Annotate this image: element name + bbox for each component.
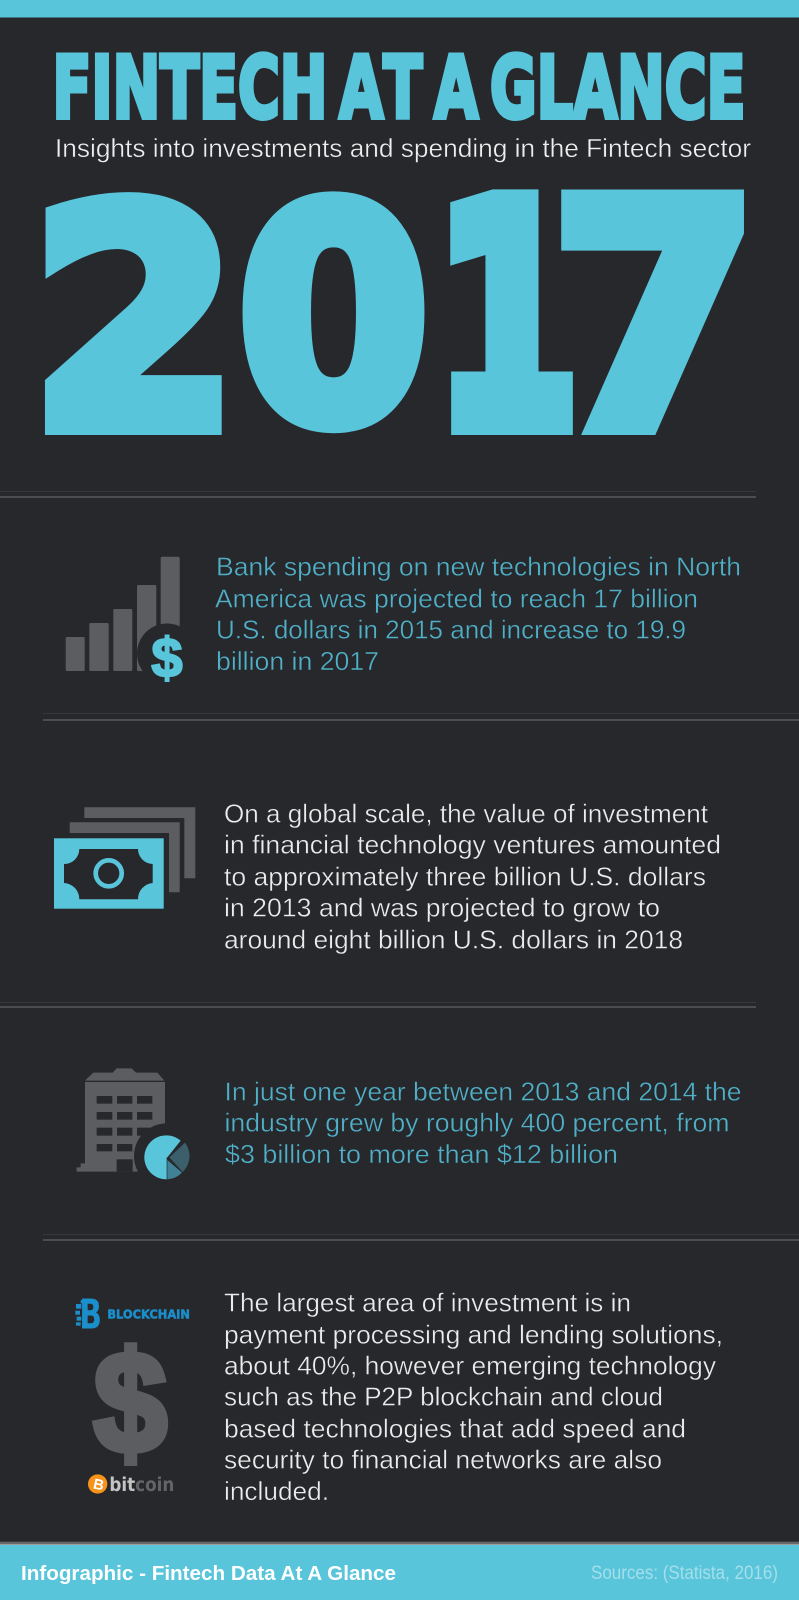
sources: Sources: (Statista, 2016) <box>591 1563 778 1584</box>
icon: blockchain logo, dollar sign and bitcoin logo <box>75 1292 190 1496</box>
logo: blockchain: B <box>79 1292 102 1339</box>
panel: investment areas <box>75 1287 723 1506</box>
text: investment areas <box>224 1287 723 1506</box>
top accent band <box>0 0 799 18</box>
text: investment areas: based technologies that add speed and <box>224 1413 686 1443</box>
text: bank spending: Bank spending on new technologies in North <box>216 551 741 581</box>
text: bank spending <box>215 551 741 676</box>
text: global investment: around eight billion U.S. dollars in 2018 <box>224 924 683 954</box>
text: global investment <box>224 798 721 954</box>
text: investment areas: The largest area of investment is in <box>224 1287 631 1317</box>
text: global investment: in financial technology ventures amounted <box>224 829 721 859</box>
large year 2017: 1 <box>435 142 579 496</box>
footer title: Infographic - Fintech Data At A Glance <box>21 1563 396 1585</box>
text: investment areas: such as the P2P blockchain and cloud <box>224 1381 663 1411</box>
logo: blockchain: BLOCKCHAIN <box>107 1307 190 1322</box>
footer band <box>0 1545 799 1600</box>
logo: bitcoin: bitcoin <box>109 1475 174 1496</box>
panel: bank spending <box>66 551 741 689</box>
large year 2017: 7 <box>550 137 759 500</box>
panel: global investment <box>54 798 721 954</box>
text: investment areas: about 40%, however emerging technology <box>224 1351 716 1381</box>
logo: bitcoin <box>88 1474 174 1496</box>
logo: bitcoin: B <box>92 1476 105 1494</box>
text: industry growth: In just one year between 2013 and 2014 the <box>224 1077 742 1107</box>
text: global investment: to approximately three billion U.S. dollars <box>224 861 706 891</box>
text: global investment: in 2013 and was projected to grow to <box>224 893 660 923</box>
panel: industry growth <box>77 1068 742 1189</box>
icon: office building with pie chart <box>77 1068 199 1189</box>
large year 2017: 2 <box>30 146 239 498</box>
icon: rising bars with dollar <box>66 557 197 689</box>
text: investment areas: security to financial networks are also <box>224 1445 662 1475</box>
text: bank spending: billion in 2017 <box>216 646 379 676</box>
text: investment areas: payment processing and lending solutions, <box>224 1319 723 1349</box>
icon: dollar sign: $ <box>94 1323 167 1483</box>
icon: rising bars with dollar: $ <box>151 626 183 689</box>
large year 2017 <box>30 137 759 500</box>
text: industry growth: industry grew by roughly 400 percent, from <box>224 1108 730 1138</box>
text: global investment: On a global scale, the value of investment <box>224 798 709 828</box>
text: industry growth <box>224 1077 742 1169</box>
large year 2017: 0 <box>238 147 429 490</box>
text: bank spending: U.S. dollars in 2015 and increase to 19.9 <box>216 614 686 644</box>
subtitle: Insights into investments and spending in the Fintech sector <box>55 133 751 163</box>
text: bank spending: America was projected to reach 17 billion <box>215 583 698 613</box>
logo: blockchain <box>75 1292 190 1339</box>
icon: stack of banknotes <box>54 807 195 909</box>
text: investment areas: included. <box>224 1476 329 1506</box>
text: industry growth: $3 billion to more than $12 billion <box>225 1139 618 1169</box>
